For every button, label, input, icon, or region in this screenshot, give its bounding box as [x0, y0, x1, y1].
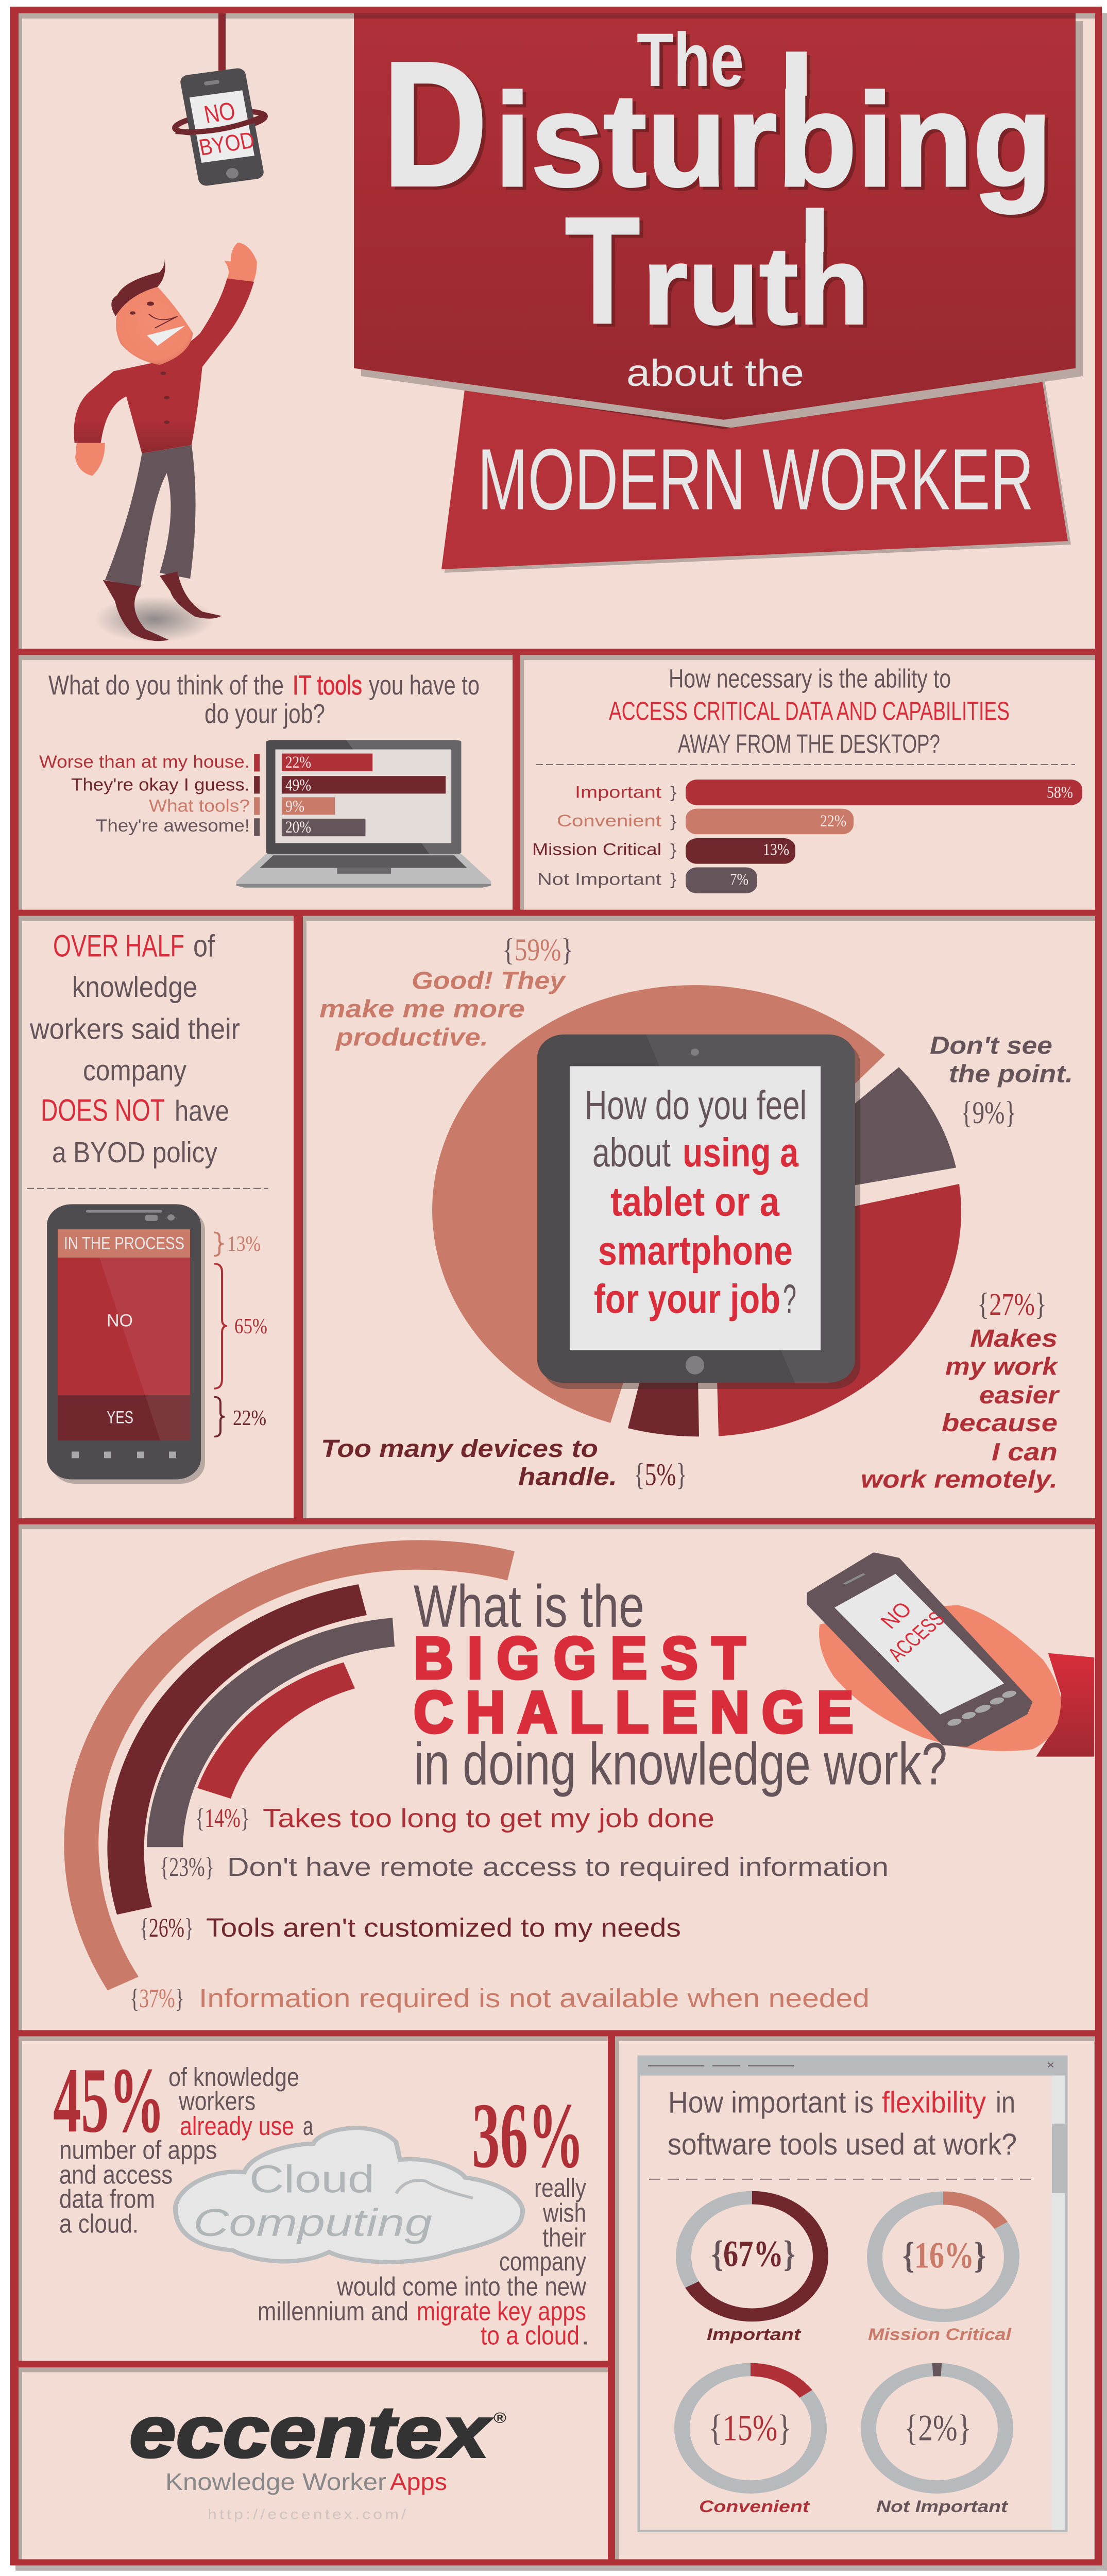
chart labels: policy percentages: 65% [234, 1314, 267, 1338]
stat: 36%: migrate key apps [417, 2296, 586, 2326]
donut: not important 2%: {2%} [904, 2407, 972, 2448]
banner: upper title ribbon [354, 13, 1083, 428]
stat: 45%: a [303, 2111, 314, 2141]
donut: not important 2% [864, 2366, 1010, 2516]
bar chart: access necessity [532, 779, 1082, 893]
panel: access critical data [520, 655, 1095, 910]
stat: 45%: a cloud. [59, 2208, 139, 2238]
heading: tablet question: using a [683, 1130, 799, 1175]
logo: eccentex: eccentex [129, 2391, 492, 2472]
chart labels: IT tools: They're okay I guess. [71, 774, 250, 794]
callout: 27% remote: my work [945, 1353, 1059, 1381]
heading: tablet question: ? [783, 1276, 796, 1321]
donut: mission critical 16%: {16%} [902, 2234, 986, 2276]
heading: biggest challenge [414, 1572, 947, 1798]
donut: mission critical 16% [868, 2198, 1012, 2344]
bar chart: access necessity: 13% [763, 840, 789, 859]
text: over half statement: workers said their [29, 1013, 240, 1045]
panel: flexibility window [615, 2036, 1095, 2559]
list item: 37%: Information required is not available when needed [199, 1983, 870, 2013]
callout: 27% remote: Makes [970, 1325, 1058, 1352]
text: over half statement: knowledge [72, 971, 197, 1004]
bar chart: access necessity: } [670, 841, 677, 859]
callout: 5% too many devices: handle. [518, 1463, 617, 1491]
heading: tablet question: for your job [594, 1276, 780, 1321]
icon: reaching man [74, 243, 257, 642]
stat: 45%: number of apps [59, 2134, 217, 2164]
heading: necessity question [609, 663, 1010, 758]
panel: IT tools [19, 655, 513, 910]
url: http://eccentex.com/ [208, 2507, 406, 2522]
stat: 36%: to a cloud [481, 2320, 580, 2350]
callout: 9% no point: Don't see [930, 1032, 1052, 1060]
heading: tablet question: tablet or a [610, 1179, 780, 1225]
text: over half statement: have [175, 1095, 229, 1127]
donut: mission critical 16%: Mission Critical [868, 2326, 1012, 2344]
panel: BYOD policy [19, 916, 294, 1518]
heading: biggest challenge: CHALLENGE [414, 1680, 854, 1745]
icon: tablet [537, 1035, 860, 1389]
icon: hanging phone with NO BYOD noose [174, 13, 266, 187]
heading: IT tools question [48, 670, 480, 730]
icon: phone chart: NO [107, 1310, 133, 1330]
logo: eccentex: ® [493, 2409, 506, 2426]
panel: hero [19, 13, 1095, 649]
heading: IT tools question: do your job? [205, 699, 325, 730]
panel: logo footer [19, 2367, 608, 2559]
callout: 59% good: {59%} [502, 933, 573, 968]
window frame: × [1047, 2059, 1054, 2072]
callout: 27% remote: {27%} [977, 1287, 1047, 1322]
callout: 5% too many devices [321, 1435, 687, 1492]
text: over half statement: of [193, 928, 215, 963]
list item: 14%: {14%} [195, 1804, 250, 1833]
heading: biggest challenge: BIGGEST [414, 1625, 745, 1691]
heading: necessity question: AWAY FROM THE DESKTOP? [678, 728, 940, 758]
text: over half statement: company [83, 1054, 186, 1087]
list item: 23%: Don't have remote access to required information [227, 1852, 889, 1882]
stat: 36%: . [581, 2320, 590, 2350]
stat: 36% [258, 2083, 590, 2350]
stat: 36%: really [534, 2173, 586, 2202]
callout: 9% no point [930, 1032, 1073, 1130]
icon: cloud: Computing [193, 2201, 432, 2245]
text: over half statement: OVER HALF [53, 928, 184, 963]
callout: 27% remote: easier [979, 1382, 1060, 1409]
chart labels: IT tools: They're awesome! [96, 816, 250, 836]
heading: flexibility question: How important is [668, 2086, 874, 2119]
chart labels: policy percentages: 13% [227, 1232, 261, 1256]
chart labels: IT tools: What tools? [149, 795, 250, 816]
stat: 45%: workers [178, 2086, 256, 2115]
icon: phone chart: YES [107, 1407, 133, 1427]
icon: cloud: Cloud [249, 2158, 374, 2201]
icon: laptop with bar chart [236, 740, 491, 888]
list item: 26%: {26%} [140, 1913, 194, 1943]
icon: hanging phone with NO BYOD noose: BYOD [197, 127, 257, 161]
heading: flexibility question [668, 2086, 1017, 2161]
stat: 36%: millennium and [258, 2296, 408, 2326]
icon: laptop with bar chart: 20% [285, 817, 311, 836]
bar chart: access necessity: 7% [730, 870, 748, 889]
callout: 59% good: make me more [319, 995, 525, 1023]
title: ruth [642, 224, 870, 347]
heading: tablet question [585, 1082, 807, 1321]
title [382, 18, 1052, 357]
bar chart: access necessity: } [670, 870, 677, 889]
icon: hand holding phone: NO [876, 1598, 917, 1633]
icon: laptop with bar chart: 9% [285, 796, 304, 816]
tagline: Knowledge Worker [165, 2469, 386, 2495]
donut: important 67%: {67%} [711, 2233, 795, 2274]
icon: laptop with bar chart: 49% [285, 775, 311, 794]
heading: tablet question: How do you feel [585, 1082, 807, 1128]
bar chart: access necessity: } [670, 812, 677, 831]
callout: 27% remote: I can [992, 1438, 1058, 1466]
donut: important 67% [684, 2198, 821, 2344]
tagline: Apps [390, 2469, 447, 2495]
stat: 36%: 36% [472, 2083, 584, 2187]
heading: flexibility question: flexibility [882, 2086, 986, 2119]
title: The [637, 18, 744, 102]
heading: IT tools question: What do you think of the [48, 670, 284, 701]
stat: 36%: would come into the new [336, 2272, 587, 2301]
heading: tablet question: about [592, 1130, 671, 1175]
icon: phone chart: IN THE PROCESS [64, 1233, 184, 1253]
stat: 36%: wish [542, 2198, 586, 2228]
list item: 23%: {23%} [160, 1853, 214, 1882]
chart labels: policy percentages: 22% [233, 1406, 266, 1430]
heading: IT tools question: you have to [369, 670, 480, 701]
stat: 36%: their [542, 2223, 586, 2252]
chart labels: policy percentages [214, 1232, 267, 1436]
banner: lower ribbon shadow and ribbon [441, 373, 1071, 573]
text: over half statement [29, 928, 240, 1169]
bar chart: access necessity: Convenient [557, 811, 661, 830]
list item: 14%: Takes too long to get my job done [263, 1803, 714, 1833]
bar chart: access necessity: } [670, 783, 677, 802]
bar chart: access necessity: 22% [820, 811, 846, 830]
callout: 5% too many devices: Too many devices to [321, 1435, 598, 1463]
callout: 9% no point: the point. [949, 1060, 1073, 1088]
donut: convenient 15%: {15%} [708, 2407, 792, 2448]
callout: 59% good: Good! They [412, 967, 567, 995]
bar chart: access necessity: 58% [1047, 783, 1073, 802]
icon: laptop with bar chart: 22% [285, 753, 311, 771]
panel: cloud computing [19, 2036, 608, 2361]
list item: 26%: Tools aren't customized to my needs [206, 1912, 681, 1942]
chart labels: IT tools [39, 752, 250, 836]
text: over half statement: a BYOD policy [52, 1137, 217, 1169]
title: D [382, 24, 488, 224]
stat: 45% [53, 2048, 314, 2238]
icon: hand holding phone [809, 1553, 1094, 1757]
stat: 45%: 45% [53, 2048, 165, 2152]
stat: 36%: company [499, 2246, 586, 2276]
text: over half statement: DOES NOT [41, 1093, 165, 1127]
subtitle [478, 352, 1034, 528]
callout: 9% no point: {9%} [961, 1095, 1016, 1130]
stat: 45%: of knowledge [168, 2062, 299, 2092]
panel: tablet pie chart [303, 916, 1095, 1518]
pie chart [432, 985, 961, 1436]
callout: 27% remote [861, 1287, 1060, 1494]
donut: convenient 15%: Convenient [699, 2497, 810, 2516]
donut: convenient 15% [682, 2369, 819, 2516]
heading: flexibility question: in [996, 2086, 1015, 2119]
icon: hanging phone with NO BYOD noose: NO [202, 97, 238, 129]
heading: tablet question: smartphone [598, 1228, 793, 1274]
title: T [564, 184, 641, 357]
list item: 37%: {37%} [130, 1984, 184, 2013]
heading: IT tools question: IT tools [293, 670, 362, 701]
subtitle: about the [626, 352, 804, 394]
callout: 27% remote: work remotely. [861, 1466, 1058, 1494]
bar chart: access necessity: Mission Critical [532, 840, 661, 859]
heading: flexibility question: software tools used at work? [668, 2128, 1017, 2161]
donut: not important 2%: Not Important [876, 2497, 1008, 2516]
bar chart: access necessity: Not Important [537, 870, 661, 889]
arc chart [64, 1540, 515, 1990]
panel: biggest challenge [19, 1524, 1095, 2030]
heading: biggest challenge: What is the [414, 1572, 644, 1639]
icon: cloud [175, 2128, 523, 2262]
icon: hand holding phone: ACCESS [883, 1607, 950, 1666]
callout: 5% too many devices: {5%} [634, 1457, 687, 1492]
icon: phone chart [47, 1204, 205, 1484]
callout: 27% remote: because [942, 1410, 1058, 1437]
callout: 59% good: productive. [335, 1024, 488, 1051]
stat: 45%: already use [180, 2111, 294, 2141]
stat: 45%: data from [59, 2183, 155, 2213]
heading: necessity question: How necessary is the ability to [669, 663, 951, 693]
chart labels: IT tools: Worse than at my house. [39, 752, 250, 771]
stat: 45%: and access [59, 2159, 173, 2189]
bar chart: access necessity: Important [575, 783, 661, 802]
donut: important 67%: Important [707, 2326, 801, 2344]
window frame [638, 2056, 1067, 2531]
callout: 59% good [319, 933, 573, 1051]
